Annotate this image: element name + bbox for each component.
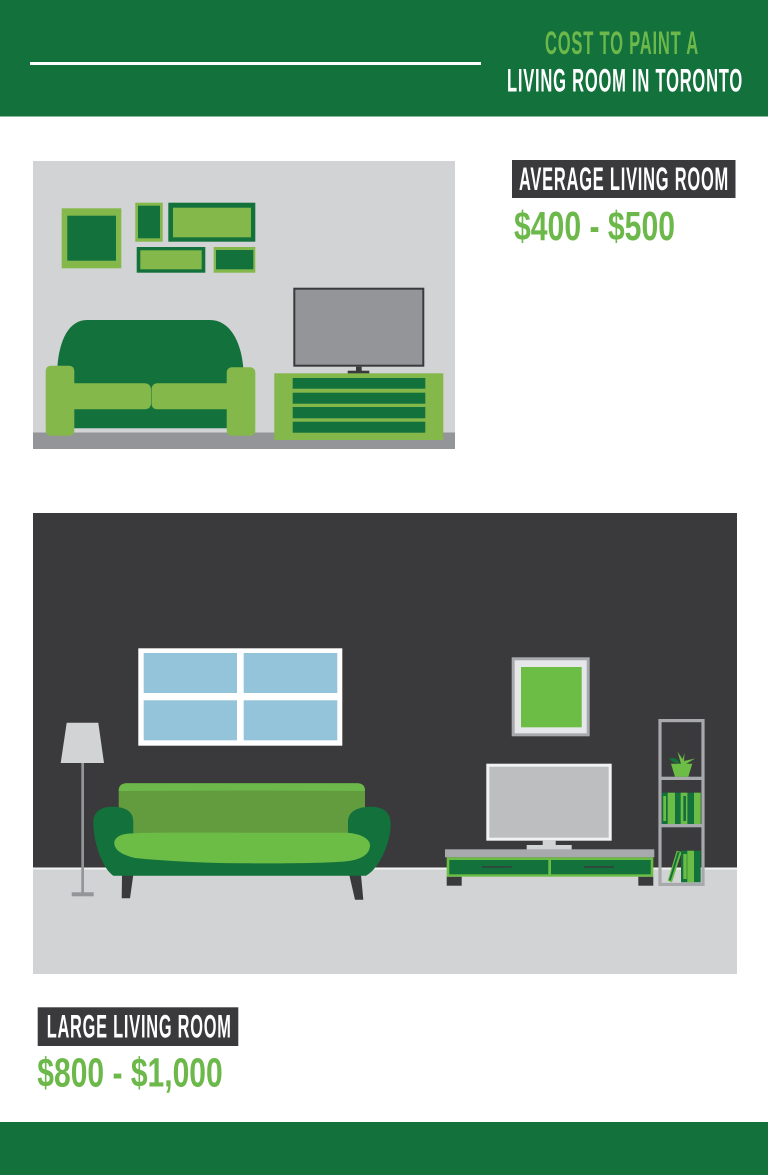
title: [507, 25, 743, 98]
floor lamp: [61, 723, 104, 896]
white television: [488, 765, 610, 850]
potted plant: [669, 752, 695, 777]
sofa: [46, 320, 255, 436]
framed picture: [512, 657, 590, 736]
lower shelf books: [668, 851, 701, 882]
tv console: [274, 373, 443, 440]
window: [138, 648, 342, 746]
price: large living room: $800 - $1,000: [37, 1050, 223, 1096]
light floor: [33, 868, 737, 974]
label: large living room: LARGE LIVING ROOM: [47, 1009, 232, 1045]
footer band: [0, 1122, 768, 1175]
floor: [33, 432, 455, 449]
price: average living room: $400 - $500: [514, 203, 675, 249]
low tv console: [445, 849, 654, 886]
panel: average living room illustration: [33, 161, 455, 449]
dark wall: [33, 513, 737, 868]
panel: large living room illustration: [33, 513, 737, 974]
bookshelf: [660, 721, 703, 884]
middle shelf books: [662, 793, 701, 824]
wall: [33, 161, 455, 433]
television: [294, 289, 423, 374]
wall pictures: [62, 203, 255, 273]
label: large living room: [38, 1007, 238, 1046]
green sofa: [93, 783, 391, 900]
skirting line: [33, 868, 737, 870]
header band: [0, 0, 768, 116]
